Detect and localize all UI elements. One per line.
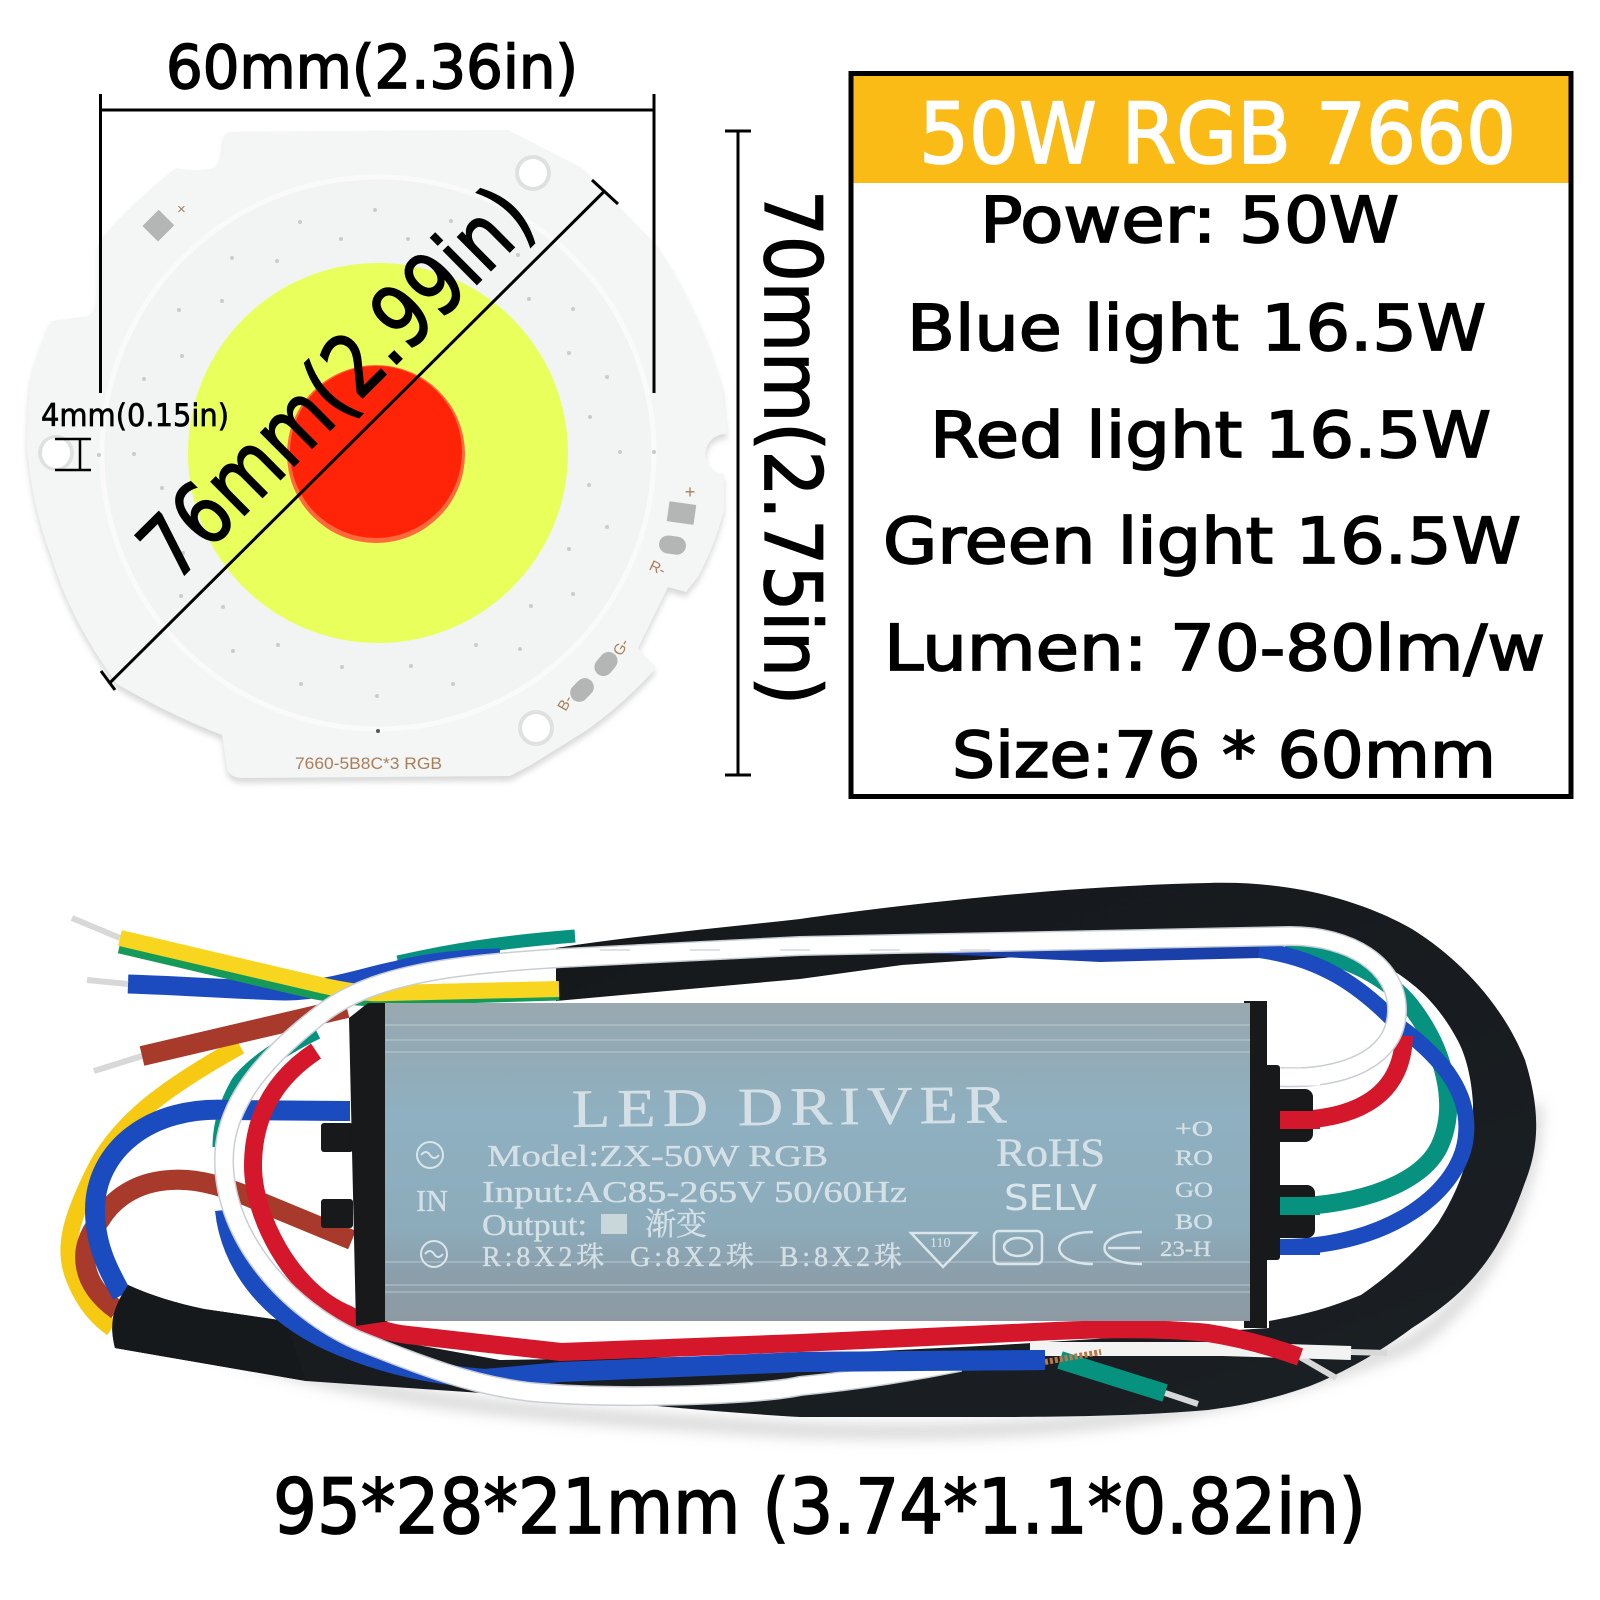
wire tips: bare strands: [72, 918, 1387, 1404]
yellow-green phosphor ring: [188, 263, 568, 643]
chip shadow: [27, 135, 727, 783]
driver label: compliance: [996, 1130, 1105, 1219]
black sleeve end near left: [112, 1285, 306, 1381]
driver label: model and ratings: Model:ZX-50W RGB: [487, 1138, 828, 1173]
spec rows: [883, 184, 1545, 792]
dimension: diagonal 76mm: [101, 167, 618, 690]
driver label: certification marks: [911, 1231, 1142, 1267]
driver label: AC symbols: [417, 1142, 447, 1267]
driver label: certification marks: 110: [930, 1236, 950, 1251]
panel: COB LED chip: [27, 130, 727, 783]
dimension: width 60mm: [100, 33, 654, 393]
driver label: compliance: RoHS: [996, 1130, 1105, 1175]
red wire: [253, 1036, 1404, 1357]
driver label: title: LED DRIVER: [571, 1074, 1014, 1139]
driver label: output terminals: 23-H: [1160, 1236, 1211, 1261]
table frame: [851, 74, 1571, 796]
contact pads: [142, 210, 696, 706]
black outer cable: [112, 883, 1536, 1417]
wire stubs over connectors: [330, 1077, 1320, 1247]
cable shadow: [120, 1104, 1535, 1432]
white wire tail: [1030, 1349, 1351, 1353]
dimension: hole 4mm: [41, 398, 229, 470]
driver label: model and ratings: R:8X2珠 G:8X2珠 B:8X2珠: [482, 1241, 902, 1273]
mounting holes: [38, 155, 554, 746]
blue wire: lower loop: [225, 1210, 1045, 1379]
driver label: output terminals: [1160, 1116, 1213, 1261]
driver label: model and ratings: Output:: [482, 1207, 587, 1242]
driver label: compliance: SELV: [1004, 1178, 1097, 1219]
driver label: model and ratings: Input:AC85-265V 50/60Hz: [482, 1174, 907, 1209]
dimension: width 60mm: 60mm(2.36in): [166, 33, 578, 103]
spec rows: Red light 16.5W: [930, 399, 1491, 472]
white wire: [224, 936, 1397, 1396]
brown wire: [142, 1008, 347, 1056]
spec rows: Blue light 16.5W: [907, 292, 1486, 365]
blue wire over white end: [800, 1360, 1045, 1362]
driver label: model and ratings: IN: [416, 1183, 448, 1218]
board markings: 7660-5B8C*3 RGB: [295, 755, 442, 773]
driver end caps and connectors: [321, 1001, 1315, 1328]
inner ring: [102, 177, 654, 729]
chip board outline: [27, 130, 727, 778]
board markings: R-: [647, 557, 668, 579]
driver housing: [385, 1003, 1250, 1321]
yellow-green wire: [120, 938, 559, 997]
dimension: height 70mm: 70mm(2.75in): [746, 190, 836, 705]
spec rows: Power: 50W: [980, 184, 1399, 257]
back wires: teal and blue: [128, 936, 1466, 1247]
panel: specification table: [851, 74, 1571, 796]
board markings: G-: [610, 636, 633, 659]
driver label: model and ratings: [416, 1138, 907, 1273]
solder dots: [97, 208, 656, 733]
driver label: output terminals: GO: [1175, 1177, 1213, 1202]
table header band: [854, 76, 1568, 183]
teal stub and copper strands: [1045, 1352, 1165, 1393]
panel: LED driver with wires: [69, 883, 1536, 1432]
caption: driver dimensions: 95*28*21mm (3.74*1.1*0.82in): [273, 1462, 1366, 1551]
driver label: output terminals: BO: [1175, 1209, 1213, 1234]
board markings: +: [685, 482, 695, 502]
spec rows: Green light 16.5W: [883, 505, 1521, 578]
spec rows: Size:76 * 60mm: [952, 719, 1496, 792]
spec rows: Lumen: 70-80lm/w: [884, 612, 1545, 685]
dimension: diagonal 76mm: 76mm(2.99in): [119, 167, 553, 599]
board markings: ×: [177, 201, 186, 218]
board markings: B-: [554, 693, 577, 714]
driver label: model and ratings: 渐变: [645, 1207, 707, 1242]
driver label: output terminals: +O: [1175, 1116, 1213, 1141]
table title: 50W RGB 7660: [919, 85, 1516, 183]
board markings: [177, 201, 695, 773]
left loop wires: yellow, brown, blue: [69, 1046, 352, 1328]
driver label: output terminals: RO: [1175, 1145, 1213, 1170]
red phosphor centre: [287, 365, 465, 543]
dimension: hole 4mm: 4mm(0.15in): [41, 398, 229, 434]
